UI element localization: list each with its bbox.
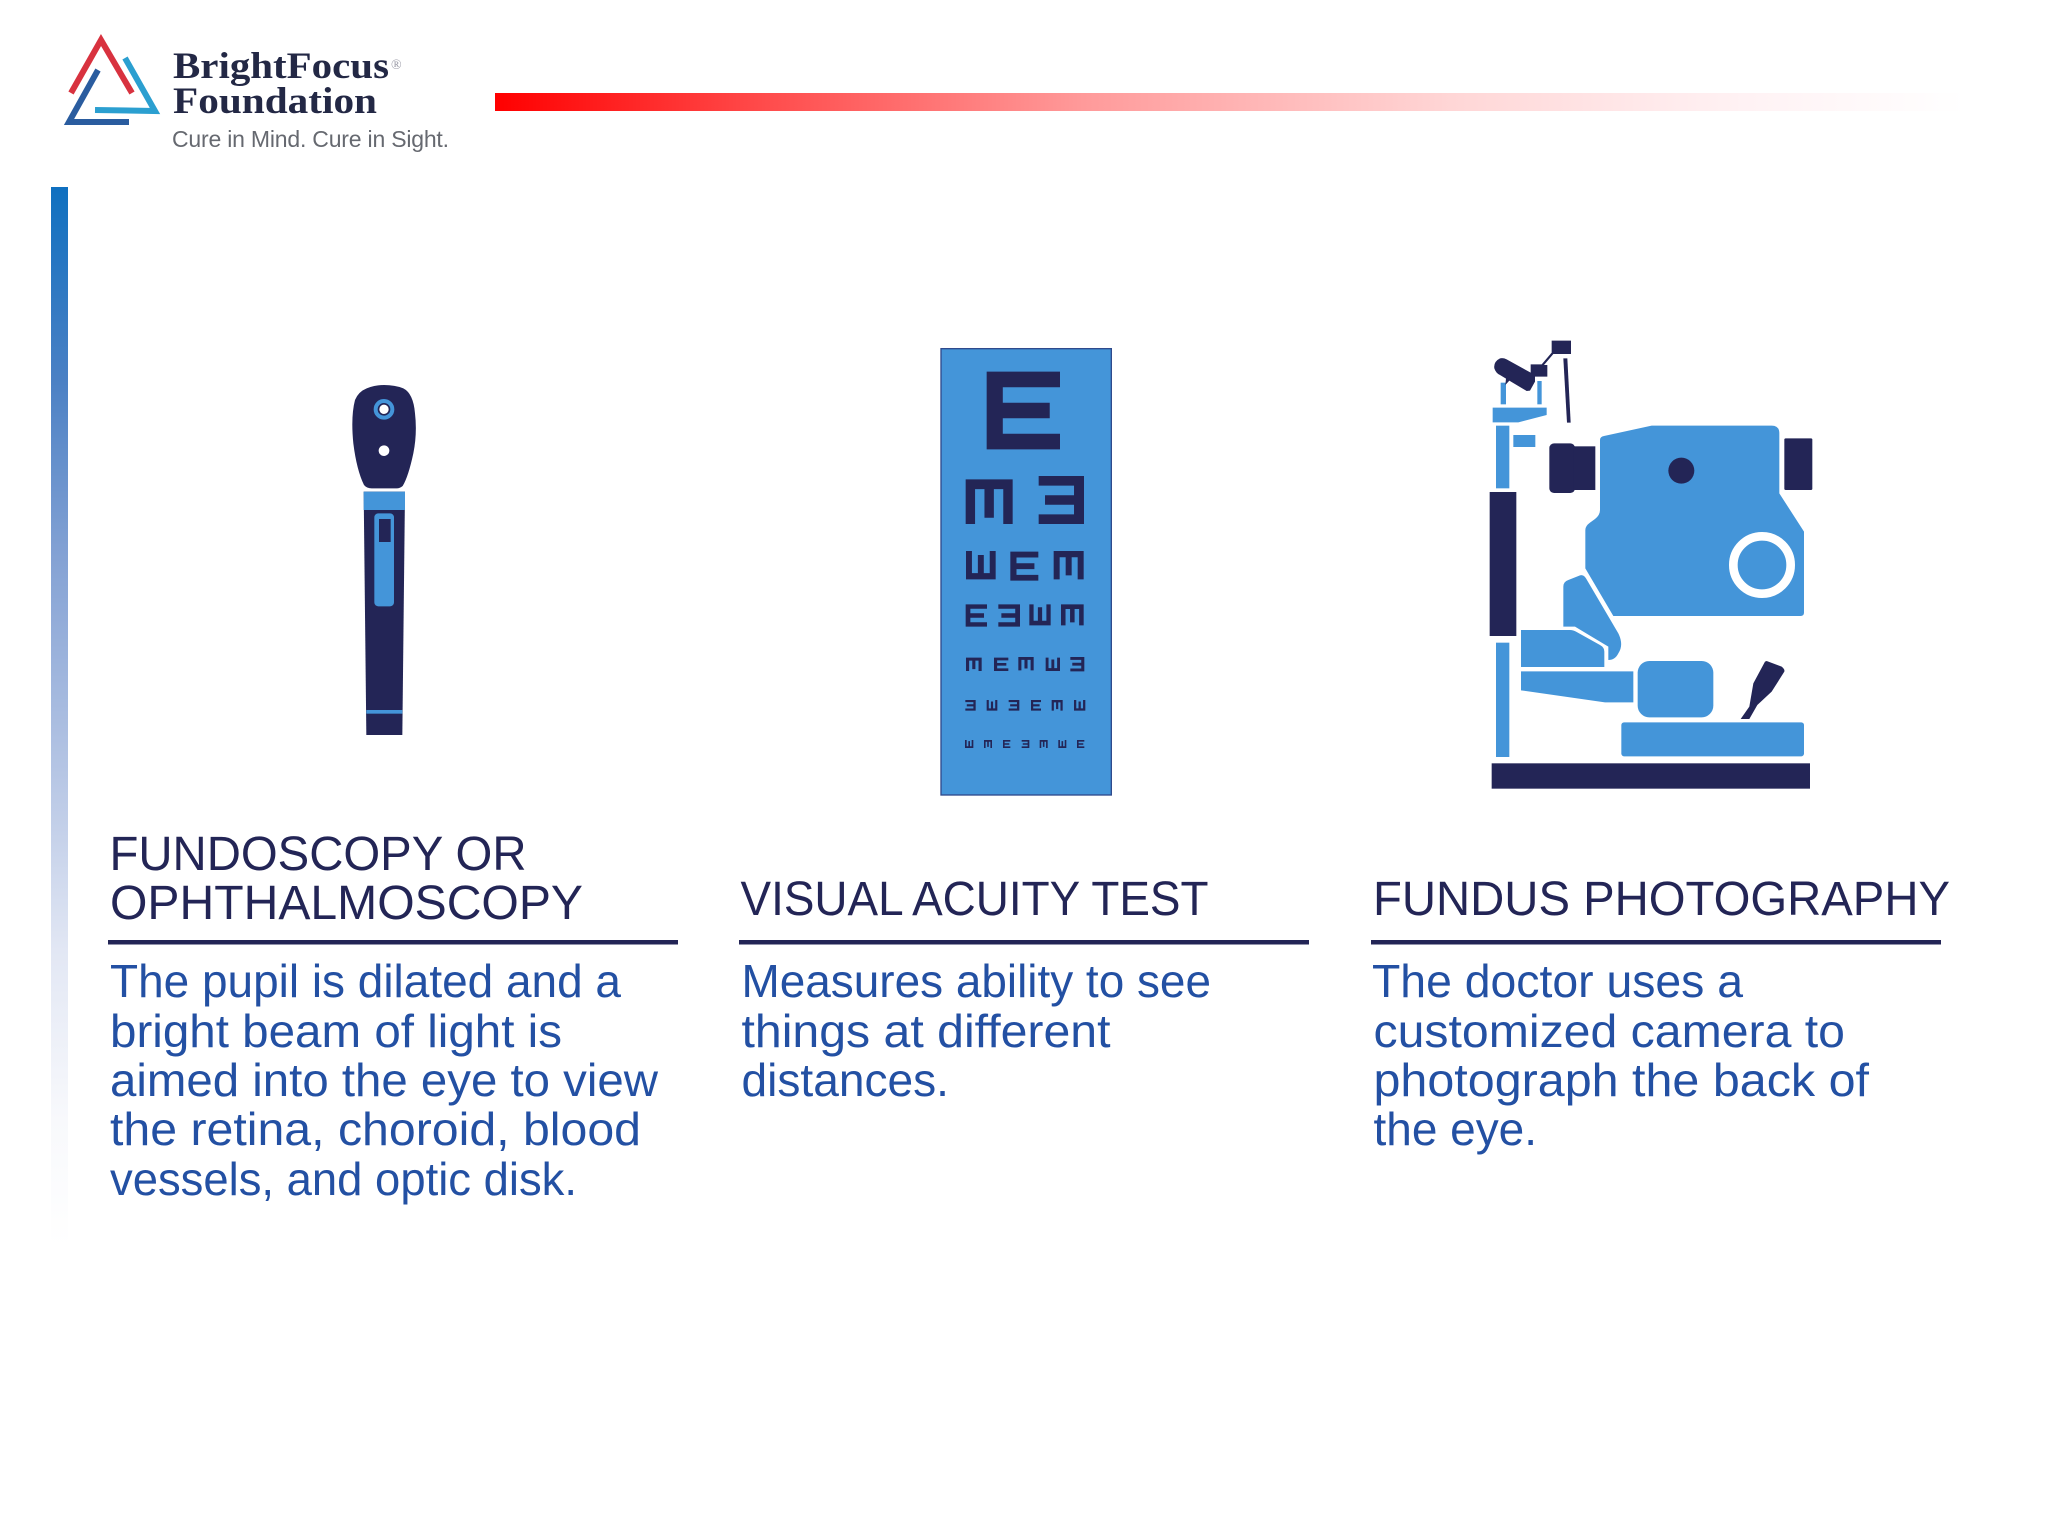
panel: fundoscopy	[108, 385, 678, 1205]
description: fundus photography: photograph the back of	[1374, 1054, 1869, 1106]
rule	[108, 940, 678, 944]
description: fundus photography: The doctor uses a	[1372, 955, 1743, 1007]
heading: visual acuity test: VISUAL ACUITY TEST	[740, 873, 1208, 926]
chart row 3	[966, 551, 1084, 581]
rule	[739, 940, 1309, 944]
chart row 6	[965, 700, 1085, 711]
chart row 4	[966, 604, 1084, 627]
icon: ophthalmoscope	[352, 385, 416, 735]
description: visual acuity test: distances.	[742, 1054, 949, 1106]
chart row 2	[966, 476, 1084, 524]
chart row 7	[965, 740, 1084, 748]
description: fundus photography	[1372, 955, 1869, 1155]
chart row 1	[987, 372, 1060, 449]
heading: fundoscopy or ophthalmoscopy: FUNDOSCOPY OR	[110, 828, 526, 881]
description: fundoscopy: The pupil is dilated and a	[110, 955, 621, 1007]
panel: fundus photography	[1371, 341, 1950, 1155]
description: fundoscopy: aimed into the eye to view	[110, 1054, 659, 1106]
blue gradient side bar	[51, 187, 68, 1247]
logo wordmark: BrightFocus	[173, 46, 389, 87]
icon: eye chart	[941, 349, 1111, 795]
description: fundoscopy: the retina, choroid, blood	[110, 1103, 641, 1155]
chart row 5	[966, 657, 1084, 671]
logo tagline: Cure in Mind. Cure in Sight.	[172, 126, 449, 152]
description: fundoscopy	[110, 955, 659, 1205]
description: visual acuity test	[742, 955, 1211, 1106]
description: fundus photography: customized camera to	[1374, 1005, 1845, 1057]
heading: fundus photography: FUNDUS PHOTOGRAPHY	[1373, 873, 1950, 926]
rule	[1371, 940, 1941, 944]
logo wordmark	[173, 46, 402, 122]
icon: triangle mark	[69, 40, 155, 122]
red gradient bar	[495, 93, 1965, 111]
icon: fundus camera	[1490, 341, 1812, 789]
description: visual acuity test: Measures ability to see	[742, 955, 1211, 1007]
description: fundoscopy: vessels, and optic disk.	[110, 1153, 577, 1205]
description: fundoscopy: bright beam of light is	[110, 1005, 562, 1057]
heading: fundoscopy or ophthalmoscopy	[110, 828, 583, 930]
panel: visual acuity test	[739, 349, 1309, 1106]
description: visual acuity test: things at different	[742, 1005, 1111, 1057]
heading: fundoscopy or ophthalmoscopy: OPHTHALMOSCOPY	[110, 877, 583, 930]
logo: BrightFocus Foundation	[69, 40, 449, 152]
description: fundus photography: the eye.	[1374, 1103, 1537, 1155]
logo wordmark: ®	[391, 58, 402, 73]
logo wordmark: Foundation	[173, 81, 377, 122]
